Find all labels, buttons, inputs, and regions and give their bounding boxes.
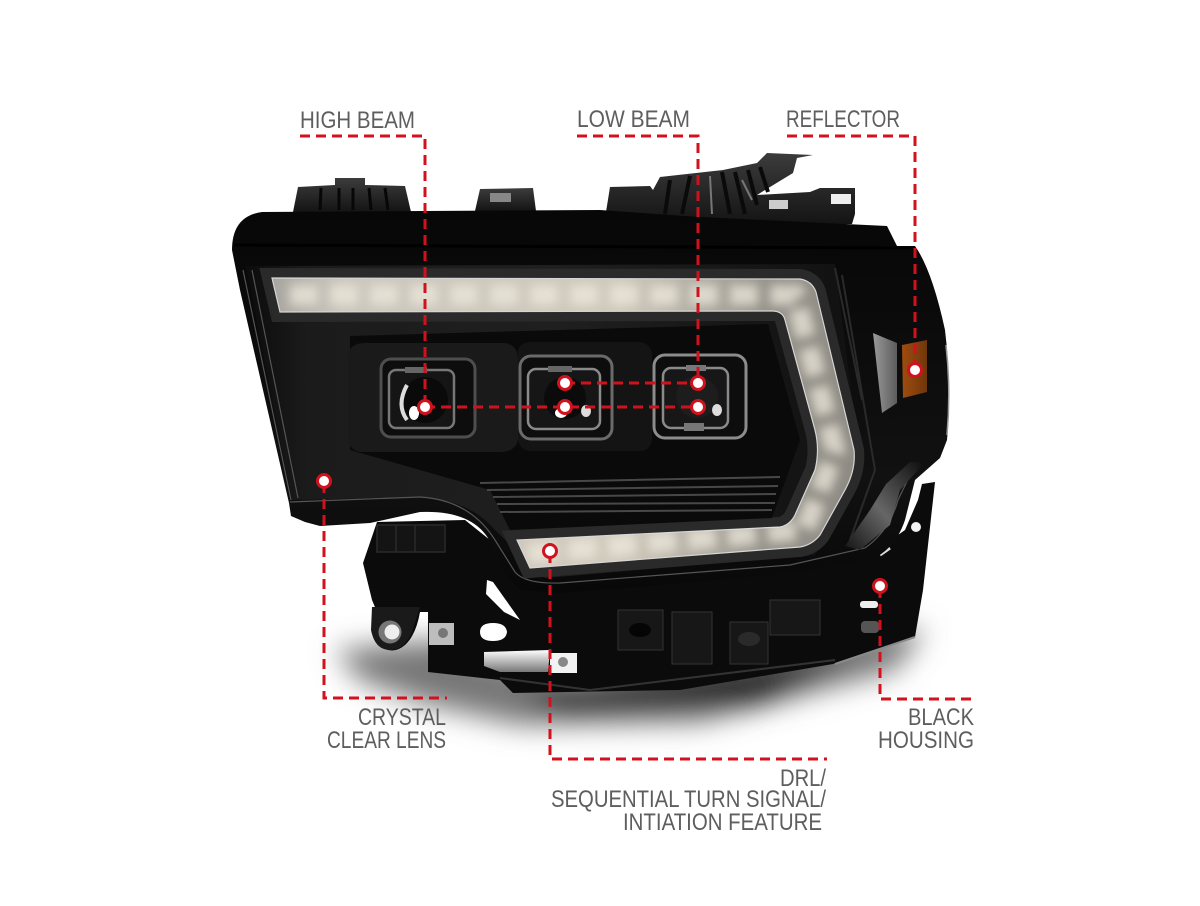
edge highlights xyxy=(243,270,910,583)
module: high beam xyxy=(381,359,475,437)
right swoop reflection xyxy=(845,462,925,550)
label: DRL sequential turn signal: SEQUENTIAL TURN SIGNAL/ xyxy=(551,786,826,813)
callout: reflector leader xyxy=(787,136,915,368)
housing slots xyxy=(860,522,921,633)
housing ribs xyxy=(377,525,445,552)
callout: black housing leader xyxy=(880,588,975,699)
projector modules and recess xyxy=(348,324,800,530)
label: black housing xyxy=(878,704,974,754)
lens body xyxy=(232,210,949,593)
marker dots xyxy=(318,364,922,592)
lower housing xyxy=(363,482,935,693)
fins xyxy=(480,477,780,512)
white cutouts xyxy=(480,580,520,641)
bezel face xyxy=(246,264,860,578)
tab: ribbed bracket xyxy=(606,153,855,224)
label: reflector: REFLECTOR xyxy=(786,106,900,133)
right panel line xyxy=(835,268,875,540)
label: DRL sequential turn signal: DRL/ xyxy=(780,765,826,792)
label: low beam: LOW BEAM xyxy=(577,106,690,133)
label: DRL sequential turn signal xyxy=(551,765,826,836)
metal clip left xyxy=(429,623,454,645)
top highlight groove xyxy=(234,245,915,248)
amber marker xyxy=(902,340,927,398)
label: crystal clear lens xyxy=(327,704,446,754)
label: black housing: HOUSING xyxy=(878,727,974,754)
mounting eye xyxy=(371,607,420,650)
metal clip centre xyxy=(550,653,577,673)
callout: high beam leader xyxy=(300,136,698,407)
module: low beam centre xyxy=(520,356,612,439)
DRL light strip xyxy=(272,278,854,568)
callout: low beam leader xyxy=(565,136,698,383)
label: crystal clear lens: CRYSTAL xyxy=(358,704,446,731)
label: black housing: BLACK xyxy=(908,704,974,731)
ground shadow xyxy=(335,630,925,725)
pods xyxy=(348,343,518,452)
tab: centre clip xyxy=(475,188,536,211)
infographic: headlight feature diagram xyxy=(232,110,974,830)
side reflector xyxy=(873,333,897,413)
callout: crystal clear lens leader xyxy=(324,483,447,698)
connector blocks xyxy=(500,600,915,690)
tab: left knob xyxy=(293,178,411,212)
side edge highlight xyxy=(946,345,949,435)
label: crystal clear lens: CLEAR LENS xyxy=(327,727,446,754)
strip surround band xyxy=(272,278,854,568)
module: low beam right xyxy=(654,355,746,438)
label: high beam: HIGH BEAM xyxy=(300,107,415,134)
label: DRL sequential turn signal: INTIATION FEATURE xyxy=(623,809,822,836)
top mounting tabs xyxy=(293,153,855,224)
callout: DRL leader xyxy=(550,553,827,759)
dark recess xyxy=(350,324,800,530)
